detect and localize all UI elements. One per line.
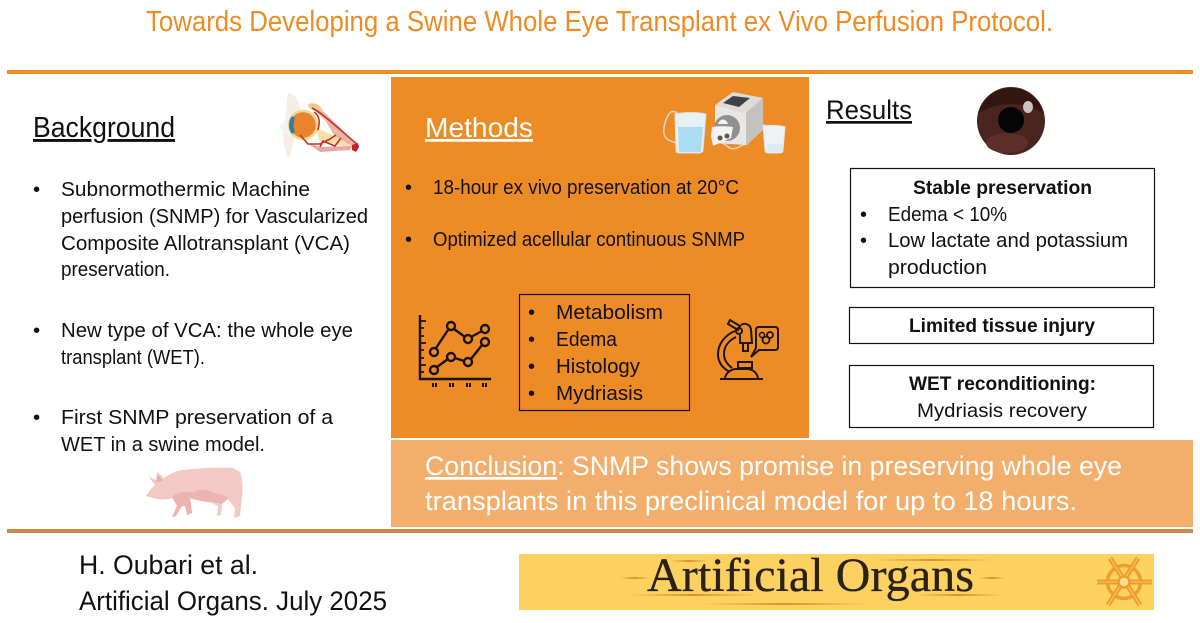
bullet list xyxy=(33,178,368,456)
conclusion text: transplants in this preclinical model for up to 18 hours. xyxy=(425,486,1077,516)
bullet 2: transplant (WET). xyxy=(61,346,205,369)
citation: H. Oubari et al. xyxy=(79,550,258,580)
bullet 1 xyxy=(33,178,368,281)
methods bullets: • xyxy=(405,229,412,251)
outcomes box: • xyxy=(528,329,535,351)
background heading: Background xyxy=(33,112,175,144)
result box: WET reconditioning: Mydriasis recovery xyxy=(917,400,1087,422)
bullet 3: • xyxy=(33,406,40,429)
result box: stable preservation: • xyxy=(860,204,867,226)
result box: stable preservation: Low lactate and potassium xyxy=(888,230,1128,252)
result box: stable preservation: Edema < 10% xyxy=(888,204,1007,226)
icon: eye anatomy xyxy=(279,93,359,158)
outcomes box: Histology xyxy=(556,356,640,378)
icon: microscope xyxy=(718,320,778,379)
bullet 1: perfusion (SNMP) for Vascularized xyxy=(61,205,368,228)
methods bullets xyxy=(405,177,745,251)
results heading: Results xyxy=(826,95,912,125)
outcomes box: Edema xyxy=(556,329,618,351)
bullet 3 xyxy=(33,406,334,456)
result box: limited tissue injury xyxy=(850,308,1154,344)
outcomes box: • xyxy=(528,356,535,378)
result box: limited tissue injury: Limited tissue injury xyxy=(909,315,1095,337)
panel: methods xyxy=(405,92,785,410)
bullet 1: • xyxy=(33,178,40,201)
methods bullets: 18-hour ex vivo preservation at 20°C xyxy=(433,177,739,199)
bullet 1: Composite Allotransplant (VCA) xyxy=(61,232,350,255)
top divider xyxy=(7,70,1193,74)
conclusion text xyxy=(425,451,1122,516)
methods bullets: • xyxy=(405,177,412,199)
bottom divider xyxy=(7,529,1193,533)
icon: line chart xyxy=(420,315,491,385)
outcomes box: • xyxy=(528,302,535,324)
bullet 2: New type of VCA: the whole eye xyxy=(61,319,353,342)
methods heading: Methods xyxy=(425,112,533,143)
outcomes box: • xyxy=(528,383,535,405)
result box: stable preservation xyxy=(850,168,1154,288)
icon: perfusion pump and beakers xyxy=(664,92,785,153)
result box: WET reconditioning: WET reconditioning: xyxy=(909,373,1096,395)
methods bullets: Optimized acellular continuous SNMP xyxy=(433,229,745,251)
result box: stable preservation: production xyxy=(888,257,987,279)
icon: pig xyxy=(146,468,243,518)
panel: results xyxy=(826,87,1154,428)
bullet 2 xyxy=(33,319,353,369)
bullet 3: WET in a swine model. xyxy=(61,433,265,456)
outcomes box: Metabolism xyxy=(556,302,663,324)
citation: Artificial Organs. July 2025 xyxy=(79,586,387,616)
panel: methods background xyxy=(391,77,809,438)
result box: stable preservation: Stable preservation xyxy=(913,177,1092,199)
panel: background xyxy=(33,93,368,518)
panel: conclusion xyxy=(391,440,1193,527)
title: Towards Developing a Swine Whole Eye Transplant ex Vivo Perfusion Protocol. xyxy=(146,6,1053,38)
result box: WET reconditioning xyxy=(850,366,1154,428)
icon: journal wheel logo xyxy=(1097,558,1152,605)
journal banner: Artificial Organs xyxy=(647,549,974,602)
outcomes box xyxy=(520,294,690,410)
journal banner xyxy=(519,549,1154,610)
result box: stable preservation: • xyxy=(860,230,867,252)
conclusion text: Conclusion: SNMP shows promise in preserving whole eye xyxy=(425,451,1122,481)
outcomes box: Mydriasis xyxy=(556,383,643,405)
bullet 1: preservation. xyxy=(61,258,170,281)
bullet 2: • xyxy=(33,319,40,342)
bullet 3: First SNMP preservation of a xyxy=(61,406,334,429)
icon: eye xyxy=(977,87,1045,155)
bullet 1: Subnormothermic Machine xyxy=(61,178,310,201)
citation xyxy=(79,550,387,616)
